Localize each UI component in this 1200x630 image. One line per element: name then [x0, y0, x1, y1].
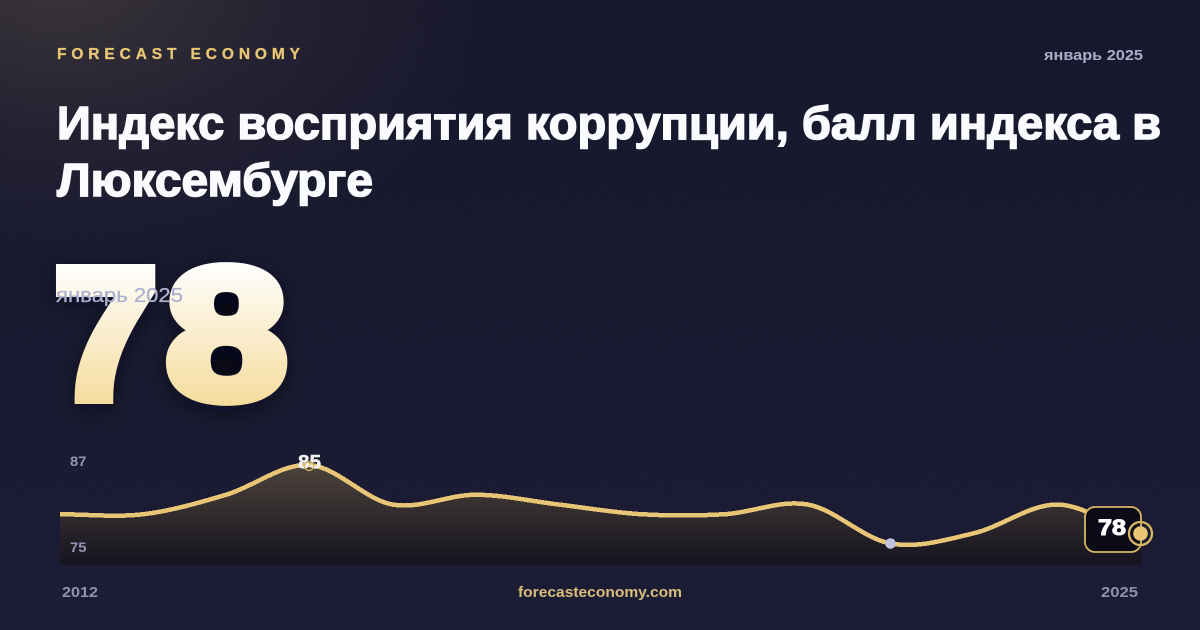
title	[57, 97, 1161, 206]
x axis start label: 2012	[62, 585, 98, 601]
title: Индекс восприятия коррупции, балл индекса в	[57, 97, 1161, 149]
area fill	[60, 465, 1141, 565]
hero value	[54, 230, 287, 438]
current value badge: 78	[1098, 515, 1126, 540]
hero value: 8	[166, 230, 287, 438]
brand label: FORECAST ECONOMY	[57, 46, 301, 63]
low marker	[885, 538, 896, 549]
y axis max label: 87	[70, 454, 86, 469]
date label top right: январь 2025	[1044, 47, 1143, 64]
source link: forecasteconomy.com	[518, 585, 682, 601]
hero date label: январь 2025	[56, 285, 183, 307]
peak value label: 85	[298, 452, 321, 474]
line chart	[60, 452, 1152, 565]
current value badge	[1085, 507, 1141, 552]
x axis end label: 2025	[1101, 585, 1138, 601]
peak marker	[304, 462, 314, 470]
current value marker	[1129, 522, 1152, 545]
trend line	[60, 465, 1140, 545]
y axis min label: 75	[70, 540, 87, 555]
title: Люксембурге	[57, 154, 373, 206]
hero value: 7	[54, 231, 157, 438]
